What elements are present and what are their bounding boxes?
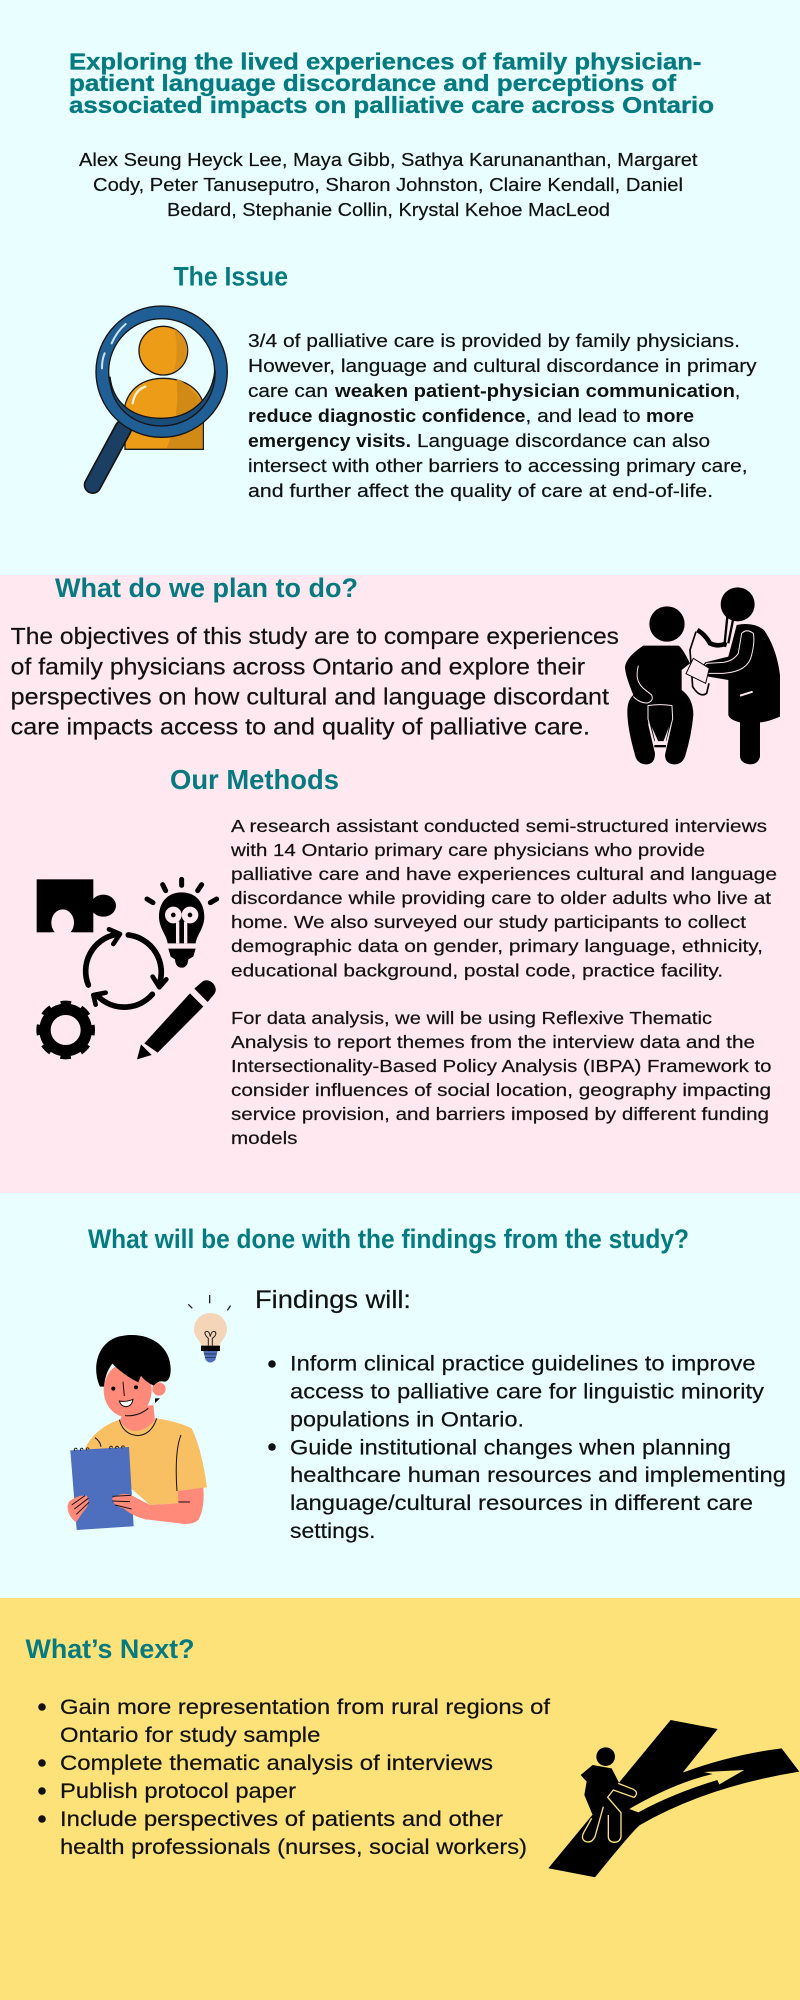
text block: methods: with 14 Ontario primary care physicians who provide	[230, 840, 705, 860]
illustration: person holding notebook with light bulb	[68, 1295, 231, 1530]
neck and arm	[120, 1405, 155, 1431]
bulleted list: next steps: Ontario for study sample	[60, 1724, 320, 1747]
heading: the issue: The Issue	[174, 262, 288, 292]
text block: methods: For data analysis, we will be using Reflexive Thematic	[231, 1008, 712, 1028]
bulleted list: next steps: Complete thematic analysis of interviews	[60, 1752, 493, 1775]
title	[69, 49, 714, 118]
text block: the issue: and further affect the quality of care at end-of-life.	[248, 480, 713, 501]
text block: the issue: ,	[735, 380, 740, 401]
text block: methods: Analysis to report themes from the interview data and the	[231, 1032, 755, 1052]
authors	[79, 149, 698, 220]
text block: methods: discordance while providing care to older adults who live at	[231, 888, 771, 908]
bulleted list: findings	[268, 1353, 786, 1543]
bulleted list: findings: Guide institutional changes when planning	[290, 1437, 731, 1460]
bulleted list: findings: healthcare human resources and implementing	[290, 1464, 786, 1487]
text block: methods: models	[231, 1128, 298, 1148]
text block: the issue: reduce diagnostic confidence	[248, 405, 526, 426]
text block: the issue	[248, 330, 757, 501]
bulleted list: findings: Inform clinical practice guidelines to improve	[290, 1353, 756, 1376]
text block: objectives: perspectives on how cultural and language discordant	[11, 684, 610, 710]
text block: methods: palliative care and have experiences cultural and language	[231, 864, 777, 884]
icon: doctor measuring patient blood pressure	[625, 587, 780, 764]
bulleted list: next steps: health professionals (nurses, social workers)	[60, 1836, 527, 1859]
panel: findings	[0, 1193, 800, 1598]
bulleted list: findings: settings.	[290, 1520, 376, 1543]
authors: Bedard, Stephanie Collin, Krystal Kehoe MacLeod	[167, 199, 610, 220]
bulleted list: findings: access to palliative care for linguistic minority	[290, 1381, 765, 1404]
text block: methods: home. We also surveyed our study participants to collect	[231, 912, 746, 932]
text block: the issue: However, language and cultural discordance in primary	[248, 355, 757, 376]
hands	[68, 1495, 89, 1522]
icon: gear	[40, 1004, 92, 1056]
text block: the issue: emergency visits.	[248, 430, 411, 451]
icon: light bulb	[188, 1295, 231, 1362]
panel: what's next	[0, 1598, 800, 2000]
authors: Alex Seung Heyck Lee, Maya Gibb, Sathya Karunananthan, Margaret	[79, 149, 698, 170]
text block: the issue: 3/4 of palliative care is provided by family physicians.	[248, 330, 740, 351]
bulleted list: findings: populations in Ontario.	[290, 1409, 524, 1432]
panel: title and the issue	[0, 0, 800, 575]
heading: what will be done with the findings: What will be done with the findings from the study?	[88, 1224, 689, 1254]
icon: pencil	[137, 980, 216, 1059]
text block: objectives: care impacts access to and quality of palliative care.	[11, 714, 590, 740]
icon: light bulb	[147, 879, 217, 968]
text block: methods: demographic data on gender, primary language, ethnicity,	[231, 936, 763, 956]
text block: methods: A research assistant conducted semi-structured interviews	[231, 816, 767, 836]
text block: methods: Intersectionality-Based Policy Analysis (IBPA) Framework to	[231, 1056, 772, 1076]
text block: the issue: care can	[248, 380, 328, 401]
title: Exploring the lived experiences of family physician-	[69, 49, 702, 75]
panel: plan and methods	[0, 573, 800, 1193]
text block: methods: consider influences of social location, geography impacting	[231, 1080, 771, 1100]
face and hair	[104, 1363, 152, 1417]
text block: objectives	[11, 623, 619, 740]
icon: puzzle, bulb, cycle, gear and pencil	[37, 879, 217, 1059]
bulleted list: next steps	[38, 1696, 550, 1859]
icon: person walking on forked road with arrow	[548, 1720, 799, 1877]
bulleted list: findings: language/cultural resources in different care	[290, 1492, 753, 1515]
notebook	[70, 1447, 134, 1530]
text block: methods: educational background, postal code, practice facility.	[231, 960, 723, 980]
heading: our methods: Our Methods	[170, 764, 339, 795]
text block: the issue: Language discordance can also	[417, 430, 710, 451]
text block: the issue: weaken patient-physician communication	[334, 380, 735, 401]
text block: the issue: intersect with other barriers to accessing primary care,	[248, 455, 748, 476]
heading: what's next: What’s Next?	[26, 1634, 194, 1664]
icon: magnifying glass over person	[93, 306, 227, 485]
heading: what do we plan to do: What do we plan to do?	[55, 573, 358, 603]
text block: methods: service provision, and barriers imposed by different funding	[231, 1104, 769, 1124]
bulleted list: next steps: Include perspectives of patients and other	[60, 1808, 503, 1831]
text block: the issue: , and lead to	[526, 405, 640, 426]
text block: objectives: of family physicians across Ontario and explore their	[11, 653, 585, 679]
icon: cycle arrows	[86, 929, 166, 1007]
text block: methods	[230, 816, 777, 1148]
text block: the issue: more	[646, 405, 694, 426]
bulleted list: next steps: Gain more representation from rural regions of	[60, 1696, 550, 1719]
shirt	[85, 1418, 207, 1505]
icon: puzzle piece	[37, 879, 116, 937]
text block: objectives: The objectives of this study are to compare experiences	[11, 623, 619, 649]
bulleted list: next steps: Publish protocol paper	[60, 1780, 296, 1803]
authors: Cody, Peter Tanuseputro, Sharon Johnston, Claire Kendall, Daniel	[93, 174, 683, 195]
text block: findings will: Findings will:	[255, 1286, 411, 1314]
title: patient language discordance and perceptions of	[69, 70, 676, 96]
title: associated impacts on palliative care across Ontario	[69, 92, 714, 118]
